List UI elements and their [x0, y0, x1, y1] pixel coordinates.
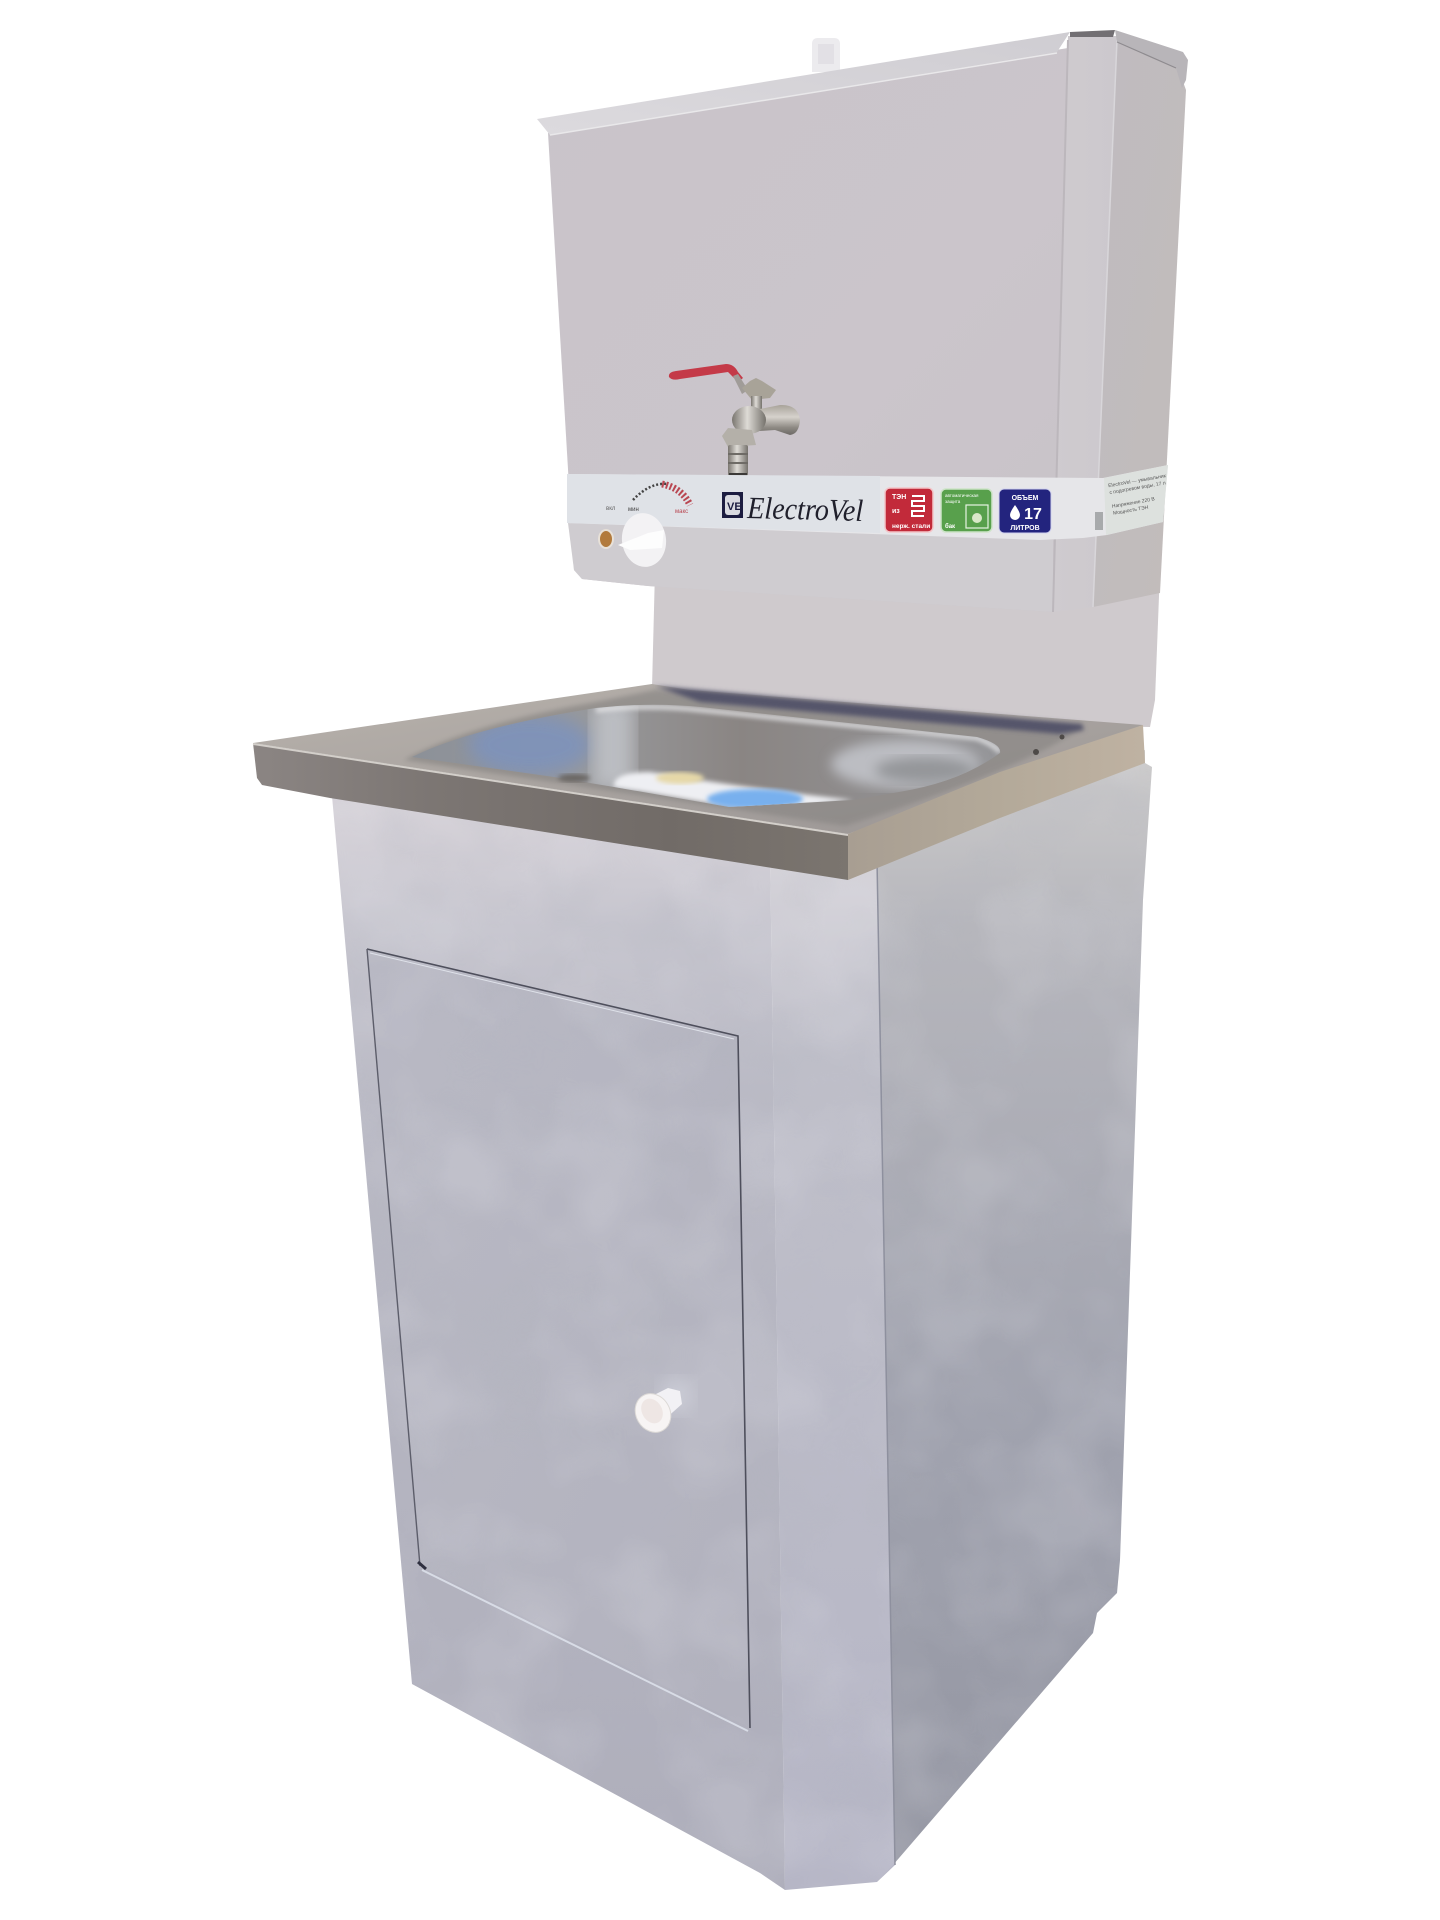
door knob — [628, 1378, 694, 1439]
union nut — [722, 428, 756, 447]
tap with red lever — [669, 364, 800, 477]
sink right edge — [848, 725, 1145, 880]
sink front edge — [253, 743, 848, 880]
blue badge: 17 litres: ЛИТРОВ — [1010, 525, 1040, 532]
lower strip under label — [568, 523, 1053, 612]
green badge: dry heating protection: автоматическая — [945, 493, 979, 498]
blue badge: 17 litres: ОБЪЕМ — [1012, 495, 1039, 502]
front label band: Напряжение 220 В — [1111, 496, 1156, 510]
red badge: heater: из — [892, 508, 900, 515]
red handle — [669, 364, 743, 382]
tank front panel — [548, 48, 1068, 612]
thermostat scale: макс — [675, 509, 688, 515]
green badge: dry heating protection: бак — [945, 523, 955, 530]
cabinet chamfered corner — [770, 850, 895, 1890]
valve top — [742, 378, 776, 400]
cabinet door — [367, 949, 750, 1731]
front label band: с подогревом воды, 17 л — [1109, 480, 1166, 496]
front label band — [567, 465, 1172, 540]
tap body — [745, 405, 800, 435]
tank chamfered corner — [1053, 36, 1117, 612]
red badge: heater: нерж. стали — [892, 523, 930, 530]
water tank body — [548, 36, 1186, 612]
thermostat scale — [606, 484, 690, 515]
ElectroVel logo: VE — [727, 501, 742, 513]
thermostat scale: мин — [628, 507, 639, 513]
blue badge: 17 litres: 17 — [1024, 506, 1042, 523]
cabinet side panel — [877, 750, 1152, 1865]
tank filler cap — [812, 38, 840, 72]
basin — [412, 704, 1000, 807]
front label band: ElectroVel — умывальник — [1108, 473, 1167, 489]
cabinet front panel — [332, 796, 785, 1890]
red badge: heater — [885, 488, 933, 532]
indicator lamp — [598, 529, 614, 549]
stainless steel sink — [253, 684, 1145, 880]
tank lid — [537, 30, 1188, 135]
ElectroVel logo: ElectroVel — [746, 490, 864, 528]
thermostat scale: вкл — [606, 506, 616, 512]
back splash panel — [652, 570, 1160, 727]
hose tail — [728, 445, 748, 476]
thermostat knob — [618, 510, 670, 570]
tape with small print — [1104, 465, 1168, 535]
front label band: Мощность ТЭН — [1113, 505, 1149, 517]
cabinet — [332, 750, 1152, 1890]
blue badge: 17 litres — [999, 489, 1051, 533]
green badge: dry heating protection: защита — [945, 499, 961, 504]
red badge: heater: ТЭН — [892, 494, 906, 501]
product photo: washstand with heated water tank — [252, 30, 1188, 1890]
recess around the basin — [404, 690, 1082, 826]
sink top rim — [253, 684, 1143, 834]
green badge: dry heating protection — [941, 489, 992, 532]
